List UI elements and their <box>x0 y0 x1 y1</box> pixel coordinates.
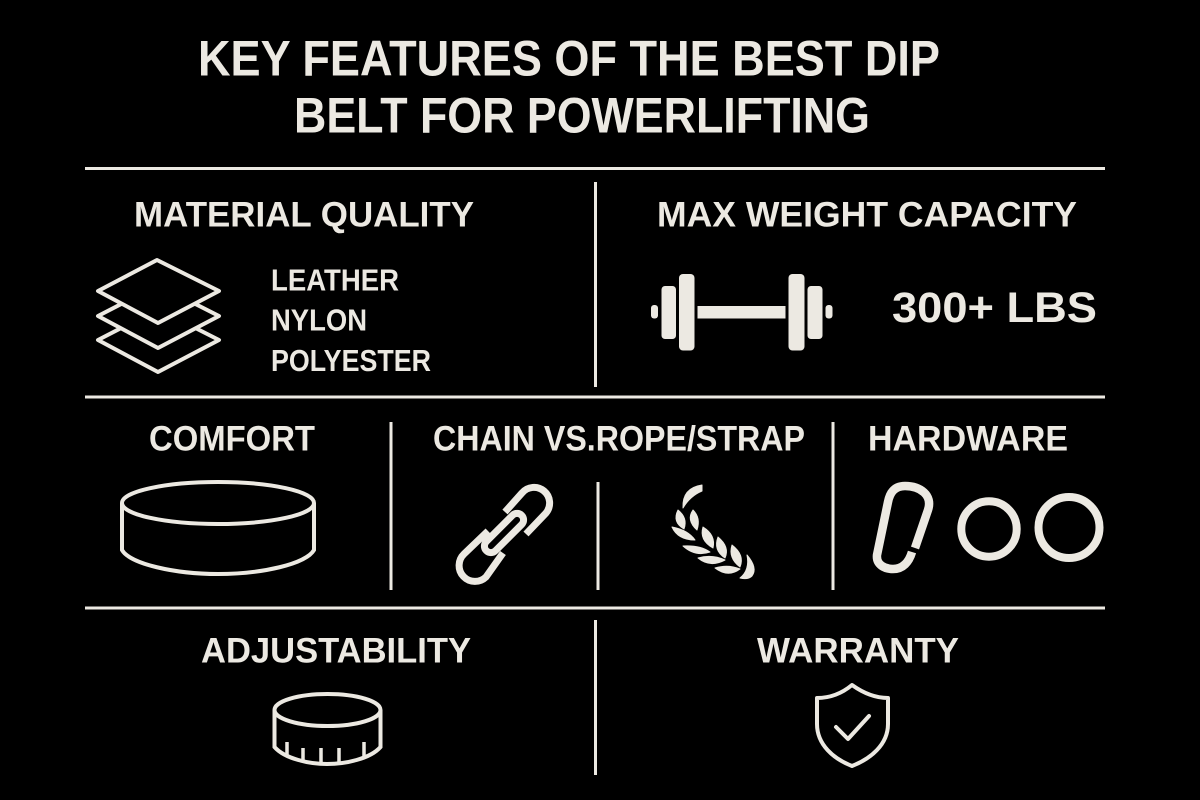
title: KEY FEATURES OF THE BEST DIP <box>198 30 940 86</box>
panel: adjustability <box>201 632 471 764</box>
icon: shield with check <box>817 685 888 766</box>
icon: rope <box>672 485 754 579</box>
panel: material quality <box>98 196 474 378</box>
icon: belt loop <box>122 482 314 574</box>
heading: chain vs rope/strap: CHAIN VS.ROPE/STRAP <box>433 420 805 458</box>
heading: comfort: COMFORT <box>149 420 315 458</box>
panel: max weight capacity <box>651 196 1097 350</box>
heading: material quality: MATERIAL QUALITY <box>134 196 474 234</box>
icon: measuring tape <box>274 694 380 764</box>
icon: ring <box>961 501 1017 557</box>
weight value: 300+ LBS <box>892 284 1097 332</box>
panel: comfort <box>122 420 315 574</box>
icon: ring large <box>1038 497 1100 558</box>
heading: warranty: WARRANTY <box>757 632 959 670</box>
material list: LEATHER <box>271 262 399 298</box>
material list <box>271 262 431 378</box>
material list: NYLON <box>271 302 367 338</box>
material list: POLYESTER <box>271 343 431 378</box>
title: BELT FOR POWERLIFTING <box>294 88 870 144</box>
icon: dumbbell <box>651 274 832 350</box>
title <box>198 30 940 144</box>
icon: layers <box>98 260 219 372</box>
heading: hardware: HARDWARE <box>868 420 1068 458</box>
icon: carabiner <box>877 486 929 569</box>
icon: chain <box>459 487 550 581</box>
panel: chain vs rope/strap <box>433 420 805 581</box>
panel: warranty <box>757 632 959 766</box>
panel: hardware <box>868 420 1100 569</box>
heading: adjustability: ADJUSTABILITY <box>201 632 471 670</box>
heading: max weight capacity: MAX WEIGHT CAPACITY <box>657 196 1077 234</box>
